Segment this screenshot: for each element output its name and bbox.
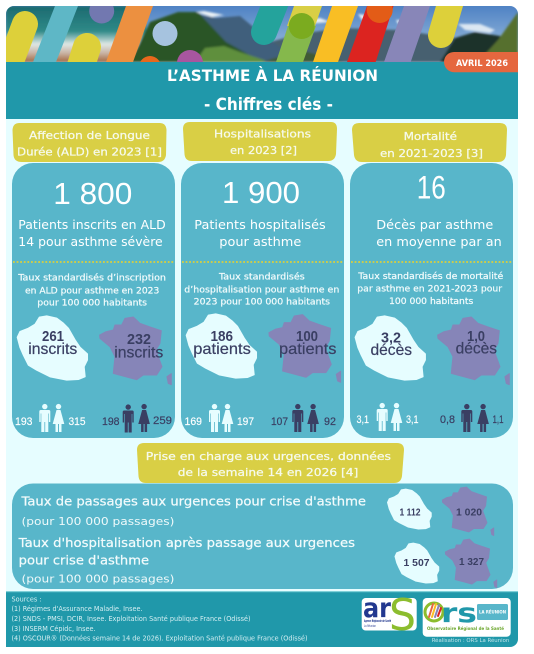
map: La Réunion 186 patients: patients: [193, 341, 251, 358]
sex breakdown: La Réunion mortalité: 3,1: [356, 414, 369, 426]
sex breakdown: France mortalité: [440, 404, 504, 432]
key figure: ALD patients: 1 800: [53, 176, 132, 211]
description: ALD patients: 14 pour asthme sévère: [18, 235, 163, 249]
logo: ORS: rs: [441, 598, 477, 629]
map: La Réunion 261 inscrits: [17, 316, 87, 380]
sources: [12, 596, 308, 642]
map: La Réunion 1 507: [395, 543, 439, 583]
map: France 232 inscrits: [100, 317, 171, 385]
rate description: ALD: pour 100 000 habitants: [37, 299, 147, 309]
map: La Réunion 1 507: 1 507: [404, 558, 430, 569]
sex breakdown: La Réunion ALD: 315: [68, 416, 86, 428]
date badge: AVRIL 2026: [456, 59, 508, 69]
footer: [6, 590, 518, 647]
rate description: hospitalisations: [184, 271, 339, 307]
rate description: mortalité: [357, 271, 503, 307]
sex breakdown: France mortalité: 1,1: [492, 414, 504, 426]
sources: Sources :: [12, 596, 42, 604]
rate description: hospitalisations: d’hospitalisation pour asthme en: [184, 285, 339, 295]
sex breakdown: France hospitalisations: [271, 404, 336, 432]
logo: ARS: S: [389, 590, 416, 641]
heading: mortalité: Mortalité: [404, 131, 457, 143]
map: France 232 inscrits: inscrits: [114, 344, 163, 362]
date badge: [444, 52, 518, 72]
key figure: deaths: 16: [417, 169, 446, 205]
map: France 1 327: 1 327: [459, 557, 484, 568]
rate description: mortalité: 100 000 habitants: [389, 297, 474, 307]
rate description: mortalité: par asthme en 2021-2023 pour: [357, 285, 502, 295]
text: taux d'hospitalisation: pour crise d'asthme: [19, 554, 149, 568]
sex breakdown: La Réunion hospitalisations: 197: [237, 416, 254, 428]
description: deaths: en moyenne par an: [376, 235, 502, 249]
map: La Réunion 3,2 décès: 3,2: [381, 330, 401, 346]
sex breakdown: La Réunion hospitalisations: 169: [184, 416, 202, 428]
map: La Réunion 3,2 décès: [355, 316, 425, 380]
key figure: hospitalised patients: 1 900: [222, 175, 300, 210]
description: ALD patients: Patients inscrits en ALD: [18, 218, 166, 232]
description: hospitalised patients: pour asthme: [219, 235, 301, 249]
map: France 100 patients: [269, 315, 341, 382]
rate description: ALD: en ALD pour asthme en 2023: [25, 286, 159, 296]
heading: urgences: [137, 443, 404, 483]
sex breakdown: France mortalité: 0,8: [440, 414, 455, 426]
map: France 100 patients: patients: [279, 341, 336, 358]
title: L’ASTHME À LA RÉUNION: [167, 66, 378, 85]
panel: urgences: [12, 484, 513, 589]
map: France 1 020: 1 020: [456, 508, 482, 518]
rate description: hospitalisations: Taux standardisés: [218, 271, 305, 282]
description: ALD patients: [18, 218, 166, 249]
map: La Réunion 1 112: [387, 489, 431, 529]
heading: hospitalisations: [183, 122, 337, 161]
map: La Réunion 1 112: 1 112: [400, 508, 421, 518]
sex breakdown: France hospitalisations: 107: [271, 416, 288, 428]
rate description: ALD: [17, 273, 166, 309]
heading: mortalité: [352, 123, 507, 162]
heading: hospitalisations: en 2023 [2]: [230, 145, 297, 157]
sex breakdown: France hospitalisations: 92: [324, 416, 336, 428]
heading: urgences: de la semaine 14 en 2026 [4]: [178, 467, 358, 479]
map: France 1 327: [445, 539, 497, 588]
text: taux de passages: Taux de passages aux urgences pour crise d'asthme: [20, 494, 366, 508]
logo: ARS: La Réunion: [364, 624, 376, 628]
subtitle: - Chiffres clés -: [204, 95, 333, 115]
description: hospitalised patients: [194, 218, 326, 249]
sources: (2) SNDS - PMSI, DCIR, Insee. Exploitation Santé publique France (Odissé): [12, 615, 251, 623]
text: taux d'hospitalisation: Taux d'hospitalisation après passage aux urgences: [18, 536, 355, 550]
map: France 100 patients: 100: [296, 328, 318, 345]
panel: mortalité: [350, 163, 513, 438]
logo: ARS: [362, 590, 417, 641]
sex breakdown: France ALD: [102, 404, 172, 432]
text: taux d'hospitalisation: (pour 100 000 passages): [22, 572, 174, 585]
logo: ORS: LA RÉUNION: [479, 610, 506, 614]
sex breakdown: La Réunion ALD: [15, 404, 86, 432]
heading: hospitalisations: Hospitalisations: [214, 128, 311, 140]
sex breakdown: France ALD: 259: [153, 415, 172, 427]
sources: (1) Régimes d'Assurance Maladie, Insee.: [12, 605, 142, 613]
sex breakdown: La Réunion mortalité: 3,1: [406, 414, 418, 426]
description: hospitalised patients: Patients hospitalisés: [194, 218, 326, 232]
text: taux de passages: (pour 100 000 passages): [22, 515, 174, 528]
map: La Réunion 261 inscrits: inscrits: [28, 341, 77, 358]
logo: ORS: [423, 598, 511, 637]
text: taux d'hospitalisation: [18, 536, 355, 585]
sources: (4) OSCOUR® (Données semaine 14 de 2026). Exploitation Santé publique France (Odissé): [12, 634, 308, 642]
logo: ARS: ar: [363, 593, 392, 624]
title band: [6, 62, 518, 119]
heading: mortalité: en 2021-2023 [3]: [380, 148, 483, 160]
panel: hospitalisations: [181, 163, 344, 438]
heading: ALD: [12, 123, 166, 162]
map: La Réunion 3,2 décès: décès: [370, 342, 412, 359]
logo: ARS: Agence Régionale de Santé: [364, 619, 391, 623]
map: La Réunion 186 patients: [186, 314, 256, 378]
credit: Réalisation : ORS La Réunion: [432, 637, 510, 644]
sex breakdown: La Réunion mortalité: [356, 403, 418, 431]
sources: (3) INSERM Cépidc, Insee.: [12, 625, 96, 633]
page background: [6, 118, 518, 594]
text: taux de passages: [20, 494, 366, 528]
map: France 1,0 décès: 1,0: [467, 328, 485, 345]
heading: ALD: Affection de Longue: [29, 130, 150, 142]
map: La Réunion 186 patients: 186: [210, 328, 233, 345]
map: France 232 inscrits: 232: [127, 331, 151, 348]
rate description: ALD: Taux standardisés d’inscription: [17, 273, 166, 284]
sex breakdown: La Réunion hospitalisations: [184, 404, 254, 432]
map: France 1,0 décès: [438, 317, 509, 385]
map: France 1 020: [442, 487, 494, 536]
heading: ALD: Durée (ALD) en 2023 [1]: [17, 146, 162, 158]
map: La Réunion 261 inscrits: 261: [42, 328, 64, 345]
description: deaths: Décès par asthme: [376, 218, 493, 232]
rate description: hospitalisations: 2023 pour 100 000 habitants: [194, 297, 330, 307]
description: deaths: [376, 218, 502, 249]
rate description: mortalité: Taux standardisés de mortalité: [357, 271, 503, 282]
sex breakdown: La Réunion ALD: 193: [15, 416, 32, 428]
logo: ORS: Observatoire Régional de la Santé: [427, 625, 504, 632]
sex breakdown: France ALD: 198: [102, 416, 120, 428]
panel: ALD: [12, 163, 175, 438]
map: France 1,0 décès: décès: [456, 340, 497, 358]
heading: urgences: Prise en charge aux urgences, données: [146, 451, 391, 463]
header photo banner with coloured pills: [6, 6, 518, 62]
